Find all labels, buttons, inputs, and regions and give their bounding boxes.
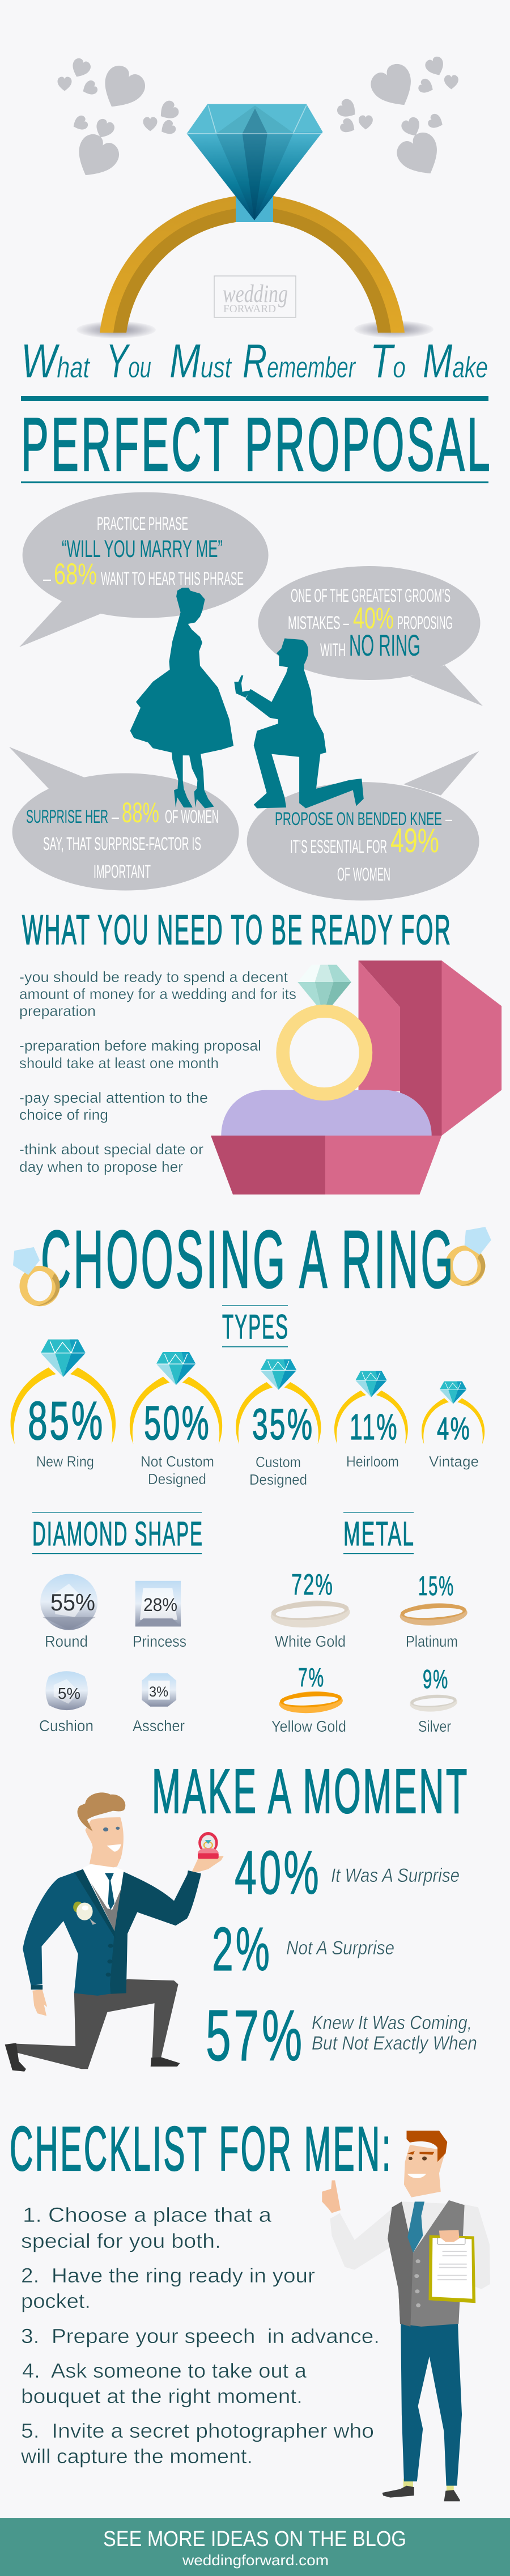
chart: diamond shapes: Princess <box>133 1633 186 1650</box>
panel: speech bubble practice phrase: “WILL YOU MARRY ME” <box>62 535 223 563</box>
text block: checklist: pocket. <box>21 2289 91 2313</box>
panel: speech bubble surprise her: SAY, THAT SURPRISE-FACTOR IS <box>43 834 201 854</box>
panel: speech bubble practice phrase: PRACTICE PHRASE <box>97 513 188 534</box>
panel: speech bubble no ring: NO RING <box>349 629 420 662</box>
chart: ring types: 11% <box>350 1406 398 1447</box>
chart: diamond shapes: Cushion <box>39 1717 94 1735</box>
panel: speech bubble surprise her: SURPRISE HER <box>26 806 108 827</box>
logo: FORWARD <box>223 303 276 315</box>
logo: wedding <box>223 280 288 308</box>
chart: diamond shapes: 5% <box>58 1685 80 1702</box>
figure: groom with clipboard <box>322 2131 490 2501</box>
chart: metal types: 7% <box>298 1663 325 1692</box>
text block: checklist: 5. Invite a secret photographer who <box>21 2419 374 2442</box>
panel: speech bubble no ring: PROPOSING <box>397 613 453 633</box>
icon: big diamond ring <box>76 104 434 338</box>
icon: ring right of heading <box>445 1227 491 1286</box>
chart: ring types: 85% <box>28 1391 105 1451</box>
chart: diamond shapes: Asscher <box>133 1717 185 1735</box>
panel: speech bubble practice phrase: 68% <box>54 558 97 591</box>
chart: ring types: Designed <box>148 1470 206 1487</box>
panel: speech bubble bended knee: OF WOMEN <box>337 864 390 885</box>
panel: speech bubble no ring <box>258 566 483 706</box>
chart: metal types: 72% <box>291 1568 334 1601</box>
figure: kneeling man silhouette <box>234 639 364 809</box>
icon: ring box <box>211 960 502 1195</box>
chart: ring types: 35% <box>252 1400 314 1449</box>
panel: speech bubble no ring: 40% <box>353 602 394 635</box>
panel: speech bubble surprise her: OF WOMEN <box>165 806 219 827</box>
text block: checklist: 3. Prepare your speech in advance. <box>21 2324 380 2348</box>
stat: not a surprise: 2% <box>212 1915 272 1984</box>
title: script line: Remember <box>243 334 356 388</box>
text block: preparation list: choice of ring <box>19 1106 108 1123</box>
stat: knew it was coming: 57% <box>206 1995 305 2076</box>
chart: metal types: 15% <box>418 1571 454 1601</box>
heading: diamond shape: DIAMOND SHAPE <box>32 1515 203 1553</box>
chart: ring types: Heirloom <box>346 1453 399 1470</box>
text block: preparation list: -pay special attention to the <box>19 1089 208 1106</box>
icon: ring left of heading <box>13 1247 60 1306</box>
text block: checklist: bouquet at the right moment. <box>21 2384 303 2408</box>
panel: speech bubble bended knee <box>247 751 479 900</box>
text block: checklist: special for you both. <box>21 2229 221 2252</box>
text block: checklist <box>20 2203 380 2468</box>
stat: knew it was coming: But Not Exactly When <box>312 2033 477 2054</box>
figure: groom kneeling with ring box <box>5 1792 224 2072</box>
footer: SEE MORE IDEAS ON THE BLOG <box>103 2527 406 2551</box>
panel: speech bubble practice phrase <box>19 492 269 647</box>
logo <box>214 276 296 317</box>
stat: not a surprise: Not A Surprise <box>286 1937 394 1959</box>
chart: metal types: 9% <box>423 1664 449 1694</box>
panel: speech bubble surprise her <box>9 747 239 891</box>
panel: hearts left <box>58 57 181 185</box>
title: script line <box>21 334 488 388</box>
chart: ring types: New Ring <box>36 1453 94 1470</box>
chart: ring types: Designed <box>249 1471 307 1488</box>
panel: speech bubble surprise her: – <box>112 806 119 827</box>
text block: checklist: will capture the moment. <box>20 2445 253 2468</box>
panel: hearts right <box>335 55 458 184</box>
footer <box>0 2518 510 2576</box>
text block: preparation list: day when to propose her <box>19 1158 183 1175</box>
panel: speech bubble surprise her: 88% <box>122 797 159 828</box>
chart: ring types: Custom <box>256 1453 301 1470</box>
chart: ring types: Not Custom <box>141 1453 214 1470</box>
panel: speech bubble bended knee: 49% <box>390 822 439 860</box>
text block: preparation list: -you should be ready to spend a decent <box>19 968 288 985</box>
text block: checklist: 1. Choose a place that a <box>23 2203 272 2226</box>
text block: checklist: 4. Ask someone to take out a <box>22 2359 307 2382</box>
stat: it was a surprise: It Was A Surprise <box>331 1865 460 1886</box>
text block: preparation list <box>19 968 296 1175</box>
panel: speech bubble no ring: MISTAKES – <box>288 613 349 633</box>
chart: ring types: 50% <box>144 1396 211 1449</box>
stat: knew it was coming: Knew It Was Coming, <box>312 2012 472 2034</box>
stat: it was a surprise <box>235 1838 460 1907</box>
chart: metal types: White Gold <box>275 1633 346 1650</box>
chart: diamond shapes: Round <box>45 1633 88 1650</box>
panel: speech bubble bended knee: – <box>445 809 452 829</box>
text block: preparation list: should take at least one month <box>19 1055 219 1072</box>
chart: metal types <box>270 1568 468 1735</box>
text block: checklist: 2. Have the ring ready in your <box>21 2264 315 2287</box>
chart: metal types: Silver <box>418 1718 451 1735</box>
title: script line: Make <box>423 334 488 388</box>
title: script line: What <box>21 334 91 388</box>
footer: weddingforward.com <box>182 2552 329 2569</box>
panel: speech bubble surprise her: IMPORTANT <box>94 861 151 882</box>
heading: types: TYPES <box>222 1308 289 1346</box>
panel: speech bubble practice phrase: WANT TO HEAR THIS PHRASE <box>101 568 244 589</box>
title: script line: To <box>370 334 406 388</box>
chart: diamond shapes <box>39 1574 186 1735</box>
chart: metal types: Platinum <box>406 1633 458 1650</box>
text block: preparation list: preparation <box>19 1002 96 1019</box>
text block: preparation list: amount of money for a wedding and for its <box>19 985 296 1002</box>
stat: it was a surprise: 40% <box>235 1838 321 1907</box>
heading: metal: METAL <box>343 1515 415 1553</box>
panel: speech bubble practice phrase: – <box>43 568 51 589</box>
text block: preparation list: -preparation before making proposal <box>19 1037 261 1054</box>
chart: diamond shapes: 55% <box>50 1589 95 1616</box>
chart: ring types: 4% <box>437 1410 471 1446</box>
stat: not a surprise <box>212 1915 394 1984</box>
panel: speech bubble bended knee: IT’S ESSENTIAL FOR <box>290 836 387 857</box>
text block: preparation list: -think about special date or <box>19 1141 203 1158</box>
chart: ring types: Vintage <box>429 1453 479 1470</box>
heading: types <box>222 1306 289 1347</box>
title: script line: Must <box>169 334 232 388</box>
panel: speech bubble no ring: WITH <box>320 640 346 660</box>
stat: knew it was coming <box>206 1995 477 2076</box>
title: script line: You <box>106 334 151 388</box>
heading: metal <box>343 1512 415 1554</box>
chart: diamond shapes: 28% <box>143 1595 177 1615</box>
chart: diamond shapes: 3% <box>149 1684 168 1700</box>
chart: metal types: Yellow Gold <box>271 1718 346 1735</box>
figure: woman silhouette <box>130 588 233 809</box>
chart: ring types <box>11 1340 484 1488</box>
